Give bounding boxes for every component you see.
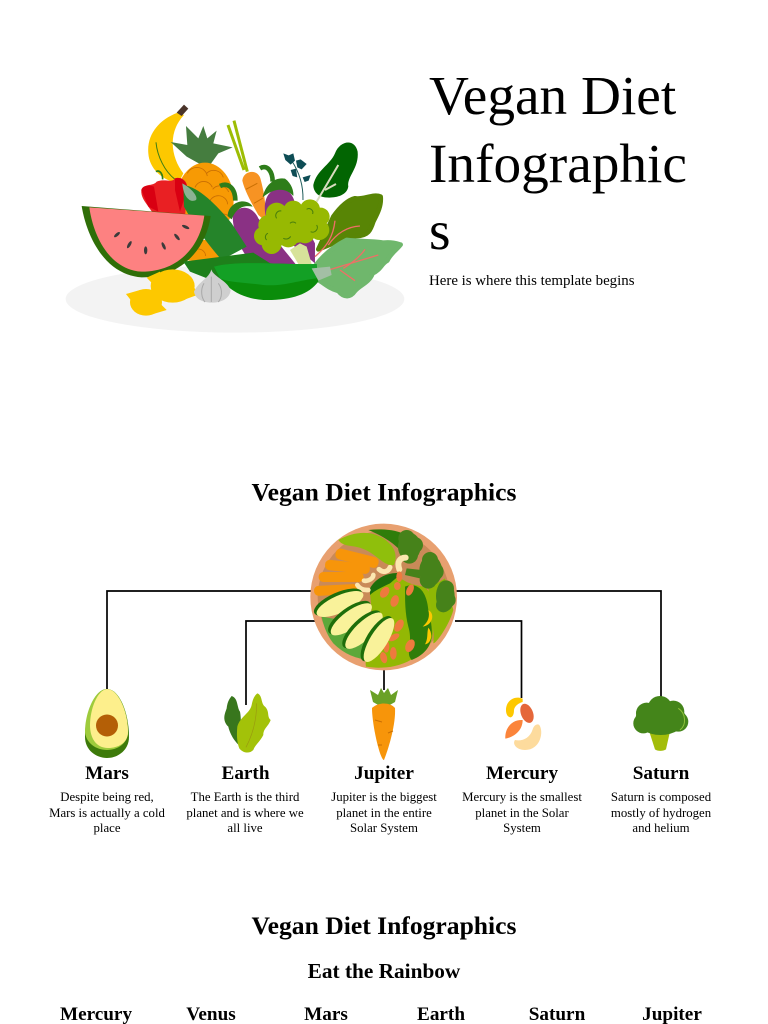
- central food bowl: [310, 524, 457, 670]
- item: Mars: Mars is actually a cold: [49, 806, 166, 820]
- icon: nuts: [505, 698, 541, 750]
- plate: [66, 265, 404, 333]
- item: Mercury: planet in the Solar: [475, 806, 569, 820]
- column labels: [60, 1004, 702, 1024]
- item: Mars: Despite being red,: [60, 790, 154, 804]
- broccoli: [254, 199, 330, 264]
- illustration: vegetable bowl: [66, 105, 404, 333]
- icon: broccoli: [633, 696, 688, 751]
- item: Mercury: [462, 698, 582, 835]
- garlic: [194, 269, 231, 303]
- icon: avocado: [85, 689, 129, 758]
- item: Saturn: mostly of hydrogen: [611, 806, 712, 820]
- cucumber back: [182, 183, 247, 260]
- lower left greens: [322, 617, 380, 659]
- item: Jupiter: Jupiter is the biggest: [331, 790, 437, 804]
- item: Earth: The Earth is the third: [191, 790, 300, 804]
- subheading: Eat the Rainbow: [308, 959, 461, 983]
- bowl: [183, 253, 332, 300]
- item: Earth: Earth: [222, 763, 270, 784]
- purple eggplant: [220, 185, 297, 265]
- broccoli: [398, 530, 456, 612]
- icon: carrot: [370, 688, 398, 760]
- avocado slices: [310, 583, 400, 666]
- herb: [283, 153, 311, 200]
- heading: section 2: Vegan Diet Infographics: [252, 478, 517, 506]
- back leaf: [315, 196, 381, 257]
- subtitle: Here is where this template begins: [429, 273, 635, 289]
- eggplant back: [260, 167, 315, 263]
- item: Saturn: and helium: [632, 821, 690, 835]
- title: Vegan Diet: [429, 65, 677, 126]
- item: Saturn: Saturn is composed: [611, 790, 712, 804]
- carrot: [228, 121, 265, 221]
- item: Earth: planet and is where we: [186, 806, 304, 820]
- dark lettuce: [368, 529, 407, 550]
- dark leaf: [313, 142, 358, 202]
- lime salad: [366, 577, 434, 668]
- carrots: [314, 548, 380, 596]
- right lime greens: [428, 578, 453, 643]
- item: Jupiter: planet in the entire: [336, 806, 432, 820]
- bowl rim: [310, 524, 457, 670]
- lemons: [126, 269, 200, 316]
- icon: leaves: [224, 693, 271, 753]
- dark greens: [405, 585, 432, 660]
- almonds: [378, 571, 417, 664]
- item: Jupiter: Jupiter: [354, 763, 414, 784]
- item: Mars: place: [94, 821, 121, 835]
- title: s: [429, 200, 451, 261]
- red pepper: [141, 171, 187, 218]
- item: Earth: [186, 693, 304, 835]
- item: Mars: [49, 689, 166, 835]
- item: Mercury: Mercury is the smallest: [462, 790, 582, 804]
- yellow slices: [423, 610, 432, 644]
- cashews: [357, 558, 406, 590]
- item: Saturn: Saturn: [633, 763, 690, 784]
- front leaf: [316, 240, 401, 296]
- item: Saturn: [611, 696, 712, 835]
- dark central leaf: [370, 573, 402, 595]
- item: Jupiter: Solar System: [350, 821, 418, 835]
- item: Mercury: Mercury: [486, 763, 558, 784]
- item: Earth: all live: [227, 821, 263, 835]
- heading: section 3: Vegan Diet Infographics: [252, 911, 517, 940]
- item: Mercury: System: [503, 821, 541, 835]
- bowl inner: [318, 531, 450, 663]
- title: Infographic: [429, 133, 687, 194]
- watermelon: [82, 206, 211, 277]
- connector lines: [107, 591, 661, 705]
- pineapple: [171, 126, 234, 261]
- banana: [148, 105, 188, 183]
- item: Mars: Mars: [85, 763, 129, 784]
- item: Jupiter: [331, 688, 437, 835]
- lettuce: [338, 533, 396, 565]
